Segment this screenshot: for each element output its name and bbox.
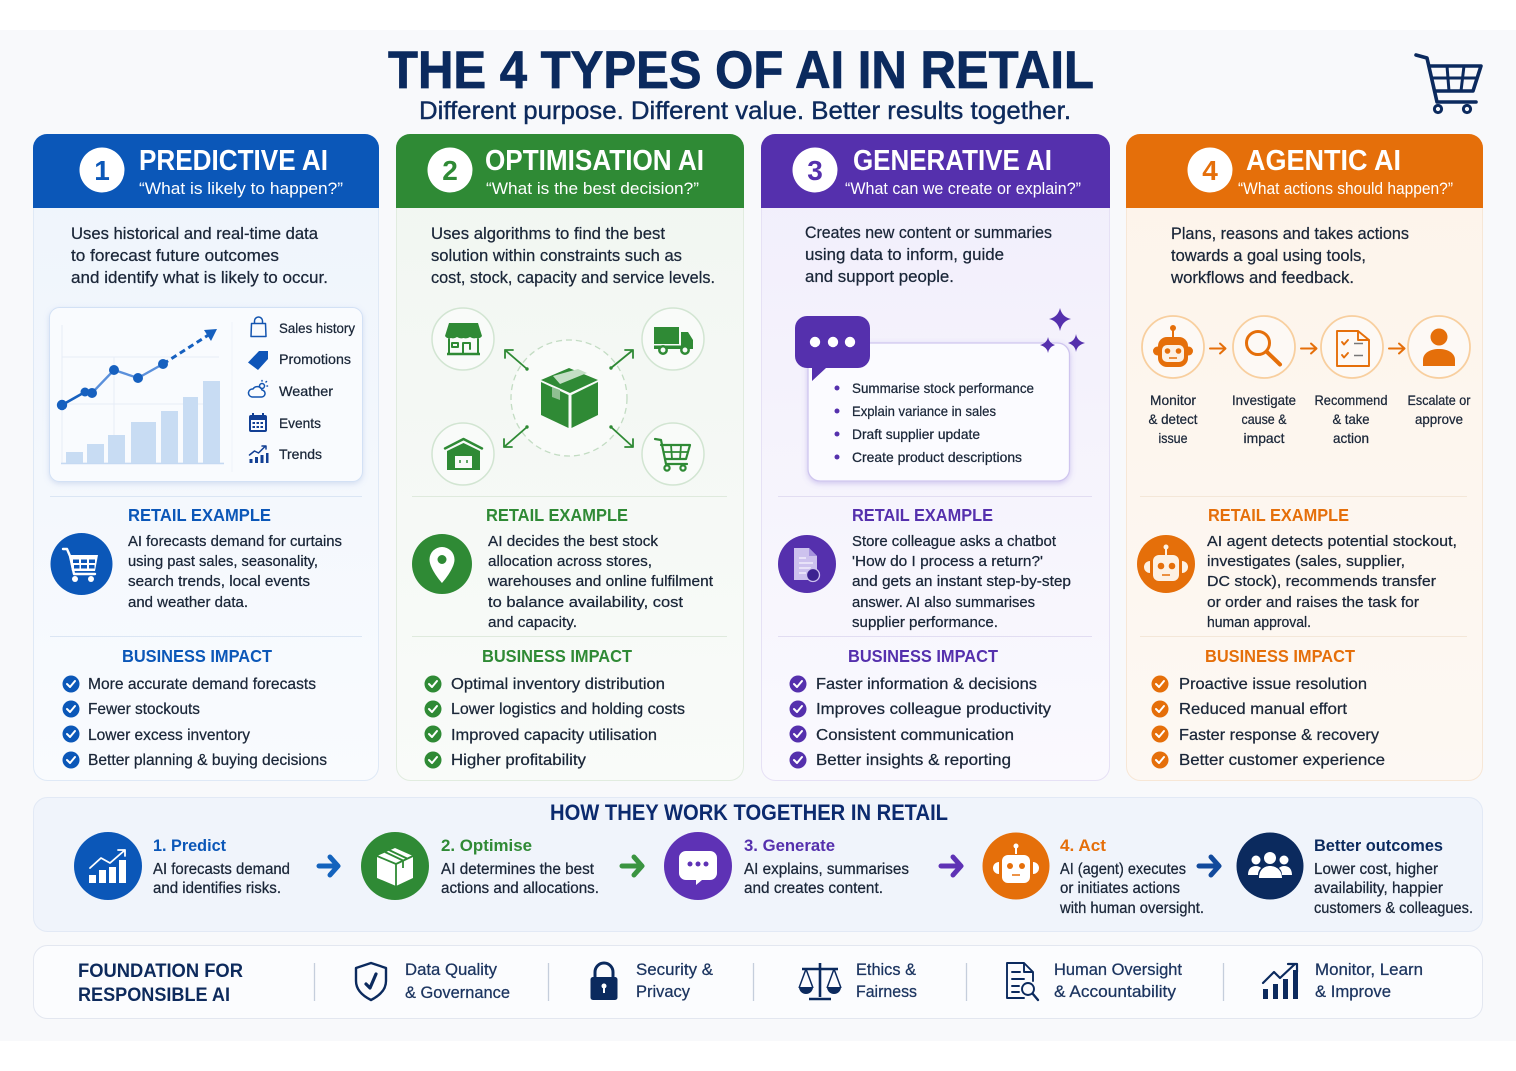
icon: location pin (412, 534, 472, 594)
title: THE 4 TYPES OF AI IN RETAIL (388, 41, 1094, 100)
retail example: and gets an instant step-by-step (852, 573, 1071, 590)
retail example (50, 505, 342, 611)
card header: “What is the best decision?” (486, 179, 699, 198)
business impact: Fewer stockouts (88, 701, 200, 718)
foundation heading (78, 961, 243, 1006)
retail example: AI decides the best stock (488, 533, 659, 550)
arrow (1199, 857, 1219, 875)
business impact (62, 646, 327, 769)
retail example: 'How do I process a return?' (852, 553, 1043, 570)
retail example: supplier performance. (852, 614, 998, 631)
retail example: RETAIL EXAMPLE (852, 505, 993, 525)
item: data quality: & Governance (405, 984, 510, 1002)
retail example: RETAIL EXAMPLE (1208, 505, 1349, 525)
chart legend: Promotions (279, 351, 351, 367)
workflow labels: cause & (1242, 411, 1287, 427)
description: workflows and feedback. (1170, 268, 1354, 287)
business impact (1152, 646, 1385, 769)
item: ethics (799, 961, 917, 1001)
business impact: Reduced manual effort (1179, 701, 1348, 718)
card header: 2 (442, 155, 458, 186)
icon: robot (1142, 316, 1204, 378)
description (71, 224, 328, 287)
arrow (1389, 344, 1404, 354)
retail example: to balance availability, cost (488, 594, 684, 611)
bullet list (834, 380, 1034, 465)
retail example: RETAIL EXAMPLE (128, 505, 271, 525)
workflow labels: issue (1158, 430, 1188, 446)
arrow (941, 857, 961, 875)
item: human oversight: & Accountability (1054, 983, 1177, 1001)
outcome: better outcomes: customers & colleagues. (1314, 900, 1473, 917)
arrow (319, 857, 338, 875)
icon: speech bubble (795, 316, 870, 381)
business impact: Optimal inventory distribution (451, 676, 665, 693)
item: human oversight: Human Oversight (1054, 961, 1182, 979)
item: monitor (1263, 961, 1423, 1001)
arrow (622, 857, 642, 875)
step 3: generate: and creates content. (744, 880, 883, 897)
outcome: better outcomes (1236, 832, 1473, 917)
bullet list: Summarise stock performance (852, 380, 1034, 396)
card header: “What can we create or explain?” (845, 179, 1081, 198)
arrows to locations (504, 350, 633, 447)
card header: “What actions should happen?” (1238, 179, 1453, 198)
chart panel (50, 308, 362, 482)
card header: 3 (807, 155, 823, 186)
item: security: Privacy (636, 983, 691, 1001)
description: Plans, reasons and takes actions (1171, 224, 1409, 243)
step 2: optimise (361, 832, 599, 900)
icon: warehouse (432, 423, 494, 485)
business impact: Proactive issue resolution (1179, 676, 1367, 693)
step 2: optimise: 2. Optimise (441, 836, 532, 855)
description: using data to inform, guide (805, 245, 1004, 264)
workflow labels: impact (1244, 430, 1285, 446)
description: to forecast future outcomes (71, 246, 279, 265)
business impact (790, 646, 1051, 769)
icon: truck (642, 308, 704, 370)
retail example: AI forecasts demand for curtains (128, 533, 342, 550)
section heading: HOW THEY WORK TOGETHER IN RETAIL (550, 800, 948, 825)
foundation heading: FOUNDATION FOR (78, 961, 243, 982)
retail example: and capacity. (488, 614, 577, 631)
card body (762, 134, 1110, 780)
business impact: More accurate demand forecasts (88, 676, 316, 693)
business impact: Improves colleague productivity (816, 701, 1051, 718)
step 4: act: or initiates actions (1060, 880, 1180, 897)
business impact: Faster information & decisions (816, 676, 1037, 693)
business impact: Faster response & recovery (1179, 727, 1379, 744)
item: ethics: Fairness (856, 983, 917, 1001)
retail example: Store colleague asks a chatbot (852, 533, 1057, 550)
item: ethics: Ethics & (856, 961, 916, 979)
description: towards a goal using tools, (1171, 246, 1366, 265)
description (1170, 224, 1409, 287)
workflow labels: & take (1332, 411, 1370, 427)
retail example: answer. AI also summarises (852, 594, 1035, 611)
workflow labels: Monitor (1150, 392, 1196, 408)
step 4: act: with human oversight. (1059, 900, 1204, 917)
business impact: Consistent communication (816, 727, 1014, 744)
card body (1126, 134, 1482, 780)
description: Uses historical and real-time data (71, 224, 319, 243)
panel: generative AI (761, 134, 1110, 780)
description: solution within constraints such as (431, 246, 682, 265)
retail example (412, 505, 714, 631)
icon: checklist (1321, 316, 1383, 378)
workflow labels: Recommend (1314, 392, 1388, 408)
outcome: better outcomes: availability, happier (1314, 880, 1443, 897)
panel: optimisation AI (396, 134, 744, 780)
step 3: generate: AI explains, summarises (744, 861, 909, 878)
card header: 1 (94, 155, 110, 186)
item: human oversight (1007, 961, 1182, 1001)
card header (761, 134, 1110, 208)
card header: OPTIMISATION AI (485, 145, 704, 177)
foundation heading: RESPONSIBLE AI (78, 985, 230, 1006)
description: Uses algorithms to find the best (431, 224, 665, 243)
workflow labels: Escalate or (1408, 392, 1471, 408)
retail example (778, 505, 1071, 631)
bullet list: Draft supplier update (852, 426, 980, 442)
chart legend: Trends (279, 446, 322, 462)
step 4: act: AI (agent) executes (1060, 861, 1186, 878)
subtitle: Different purpose. Different value. Better results together. (419, 97, 1071, 125)
panel: predictive AI (33, 134, 379, 780)
business impact: Higher profitability (451, 752, 586, 769)
workflow labels: approve (1415, 411, 1463, 427)
card body (34, 134, 378, 780)
business impact: BUSINESS IMPACT (482, 646, 632, 666)
item: security (590, 961, 713, 1001)
step 1: predict: and identifies risks. (153, 880, 281, 897)
chart legend: Events (279, 415, 321, 431)
icon: cart (642, 423, 704, 485)
retail example: investigates (sales, supplier, (1207, 553, 1405, 570)
icon: store (432, 308, 494, 370)
description: cost, stock, capacity and service levels. (431, 268, 715, 287)
retail example (1137, 505, 1457, 631)
icon: sparkles (1040, 308, 1085, 353)
card header: AGENTIC AI (1246, 145, 1401, 177)
description (431, 224, 715, 287)
icon: person (1408, 316, 1470, 378)
item: data quality: Data Quality (405, 961, 498, 979)
card header (33, 134, 379, 208)
business impact: Improved capacity utilisation (451, 727, 657, 744)
business impact: Better planning & buying decisions (88, 752, 327, 769)
diagram: stock allocation network (432, 308, 704, 485)
item: monitor: & Improve (1315, 983, 1391, 1001)
panel: foundation for responsible AI (34, 946, 1482, 1018)
retail example: allocation across stores, (488, 553, 652, 570)
chat illustration (795, 308, 1085, 481)
retail example: human approval. (1207, 614, 1311, 631)
chart legend (248, 317, 355, 463)
panel: agentic AI (1126, 134, 1483, 780)
card header: “What is likely to happen?” (139, 179, 343, 198)
workflow labels: action (1333, 430, 1369, 446)
card body (396, 134, 744, 780)
arrow (1210, 344, 1226, 354)
step 3: generate (664, 832, 909, 900)
chart legend: Weather (279, 383, 333, 399)
retail example: AI agent detects potential stockout, (1207, 533, 1457, 550)
business impact (424, 646, 685, 769)
step 1: predict: AI forecasts demand (153, 861, 290, 878)
icon: robot badge (1137, 535, 1195, 593)
outcome: better outcomes: Lower cost, higher (1314, 861, 1438, 878)
bullet list: Create product descriptions (852, 449, 1022, 465)
bullet list: Explain variance in sales (852, 403, 996, 419)
icon: cart badge (50, 533, 112, 595)
description: and identify what is likely to occur. (71, 268, 328, 287)
business impact: Better insights & reporting (816, 752, 1011, 769)
step 3: generate: 3. Generate (744, 836, 835, 855)
business impact: BUSINESS IMPACT (122, 646, 272, 666)
panel: how they work together (34, 798, 1482, 932)
description: and support people. (805, 267, 954, 286)
description (805, 223, 1052, 286)
workflow labels: Investigate (1232, 392, 1296, 408)
retail example: RETAIL EXAMPLE (486, 505, 628, 525)
card header (396, 134, 744, 208)
arrow (1301, 344, 1316, 354)
business impact: BUSINESS IMPACT (1205, 646, 1355, 666)
step 2: optimise: AI determines the best (441, 861, 595, 878)
chart: sales forecast (57, 322, 232, 472)
agent workflow (1142, 316, 1471, 446)
outcome: better outcomes: Better outcomes (1314, 836, 1443, 855)
retail example: and weather data. (128, 594, 248, 611)
chart legend: Sales history (279, 320, 355, 336)
retail example: DC stock), recommends transfer (1207, 573, 1436, 590)
step 1: predict: 1. Predict (153, 836, 226, 855)
item: monitor: Monitor, Learn (1315, 961, 1423, 979)
retail example: using past sales, seasonality, (128, 553, 318, 570)
retail example: warehouses and online fulfilment (487, 573, 714, 590)
card header: GENERATIVE AI (853, 145, 1052, 177)
business impact: Lower excess inventory (88, 727, 250, 744)
workflow labels: & detect (1148, 411, 1198, 427)
business impact: Better customer experience (1179, 752, 1385, 769)
workflow labels (1148, 392, 1471, 446)
icon: magnifier (1233, 316, 1295, 378)
icon: document chat (778, 535, 836, 593)
business impact: Lower logistics and holding costs (451, 701, 685, 718)
item: security: Security & (636, 961, 713, 979)
step 4: act (982, 832, 1204, 917)
step 2: optimise: actions and allocations. (441, 880, 599, 897)
step 4: act: 4. Act (1060, 836, 1106, 855)
step 1: predict (74, 832, 290, 900)
retail example: or order and raises the task for (1207, 594, 1419, 611)
item: data quality (356, 961, 510, 1002)
card header (1126, 134, 1483, 208)
description: Creates new content or summaries (805, 223, 1052, 242)
retail example: search trends, local events (128, 573, 310, 590)
card header: 4 (1202, 155, 1218, 186)
icon: shopping cart (1416, 55, 1481, 113)
business impact: BUSINESS IMPACT (848, 646, 998, 666)
card header: PREDICTIVE AI (139, 145, 328, 177)
icon: central box (541, 368, 598, 428)
